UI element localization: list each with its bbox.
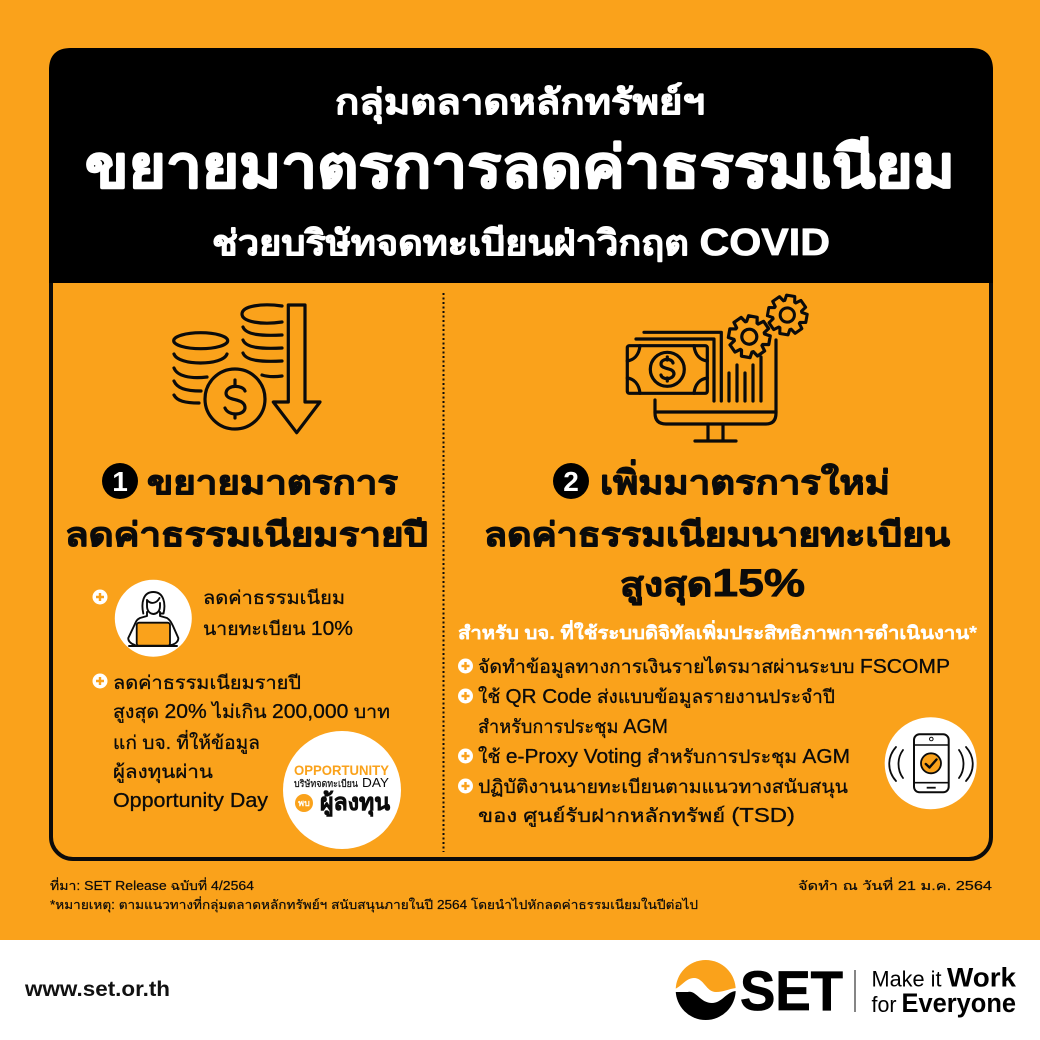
panel: main frame: [51, 50, 991, 859]
list: digital measures: สำหรับการประชุม AGM: [478, 716, 668, 739]
list: digital measures: ปฏิบัติงานนายทะเบียนตามแนวทางสนับสนุน: [478, 776, 848, 799]
badge: opportunity day: ผู้ลงทุน: [320, 789, 390, 817]
badge: opportunity day: บริษัทจดทะเบียน: [294, 778, 358, 790]
badge: number two: [553, 463, 589, 499]
badge: number two: 2: [563, 466, 579, 497]
footnote: source: ที่มา: SET Release ฉบับที่ 4/2564: [50, 877, 254, 893]
subheading: digital systems: สำหรับ บจ. ที่ใช้ระบบดิจิทัลเพิ่มประสิทธิภาพการดำเนินงาน*: [458, 620, 977, 643]
logo: SET: SET: [740, 959, 843, 1022]
badge: number one: [102, 463, 138, 499]
icon: banknote monitor and gears: [627, 292, 810, 441]
website url: www.set.or.th: [24, 978, 170, 1001]
icon: person with laptop: [115, 580, 192, 657]
heading: section two: [484, 459, 950, 606]
text block: registrar fee discount: [203, 587, 353, 640]
slogan: Work: [947, 962, 1017, 992]
heading: section two: เพิ่มมาตรการใหม่: [600, 459, 890, 501]
text block: annual fee discount: ผู้ลงทุนผ่าน: [113, 761, 213, 784]
text block: annual fee discount: Opportunity Day: [113, 790, 268, 812]
panel: black header band: [49, 48, 993, 283]
heading: line three: ช่วยบริษัทจดทะเบียนฝ่าวิกฤต COVID: [212, 222, 830, 264]
text block: annual fee discount: [113, 672, 390, 812]
text block: annual fee discount: ลดค่าธรรมเนียมรายปี: [113, 672, 301, 693]
list: digital measures: ใช้ QR Code ส่งแบบข้อมูลรายงานประจำปี: [478, 686, 835, 708]
icon: smartphone with check: [885, 717, 977, 809]
badge: opportunity day: พบ: [298, 798, 310, 808]
footnote: remark: *หมายเหตุ: ตามแนวทางที่กลุ่มตลาดหลักทรัพย์ฯ สนับสนุนภายในปี 2564 โดยนำไปหักลดค่าธรรมเนียมในปีต่อไป: [50, 896, 698, 913]
heading: section one: ลดค่าธรรมเนียมรายปี: [65, 516, 428, 553]
heading: line one: กลุ่มตลาดหลักทรัพย์ฯ: [335, 82, 705, 124]
icon: coins with down arrow: [174, 305, 320, 433]
footnote: date: จัดทำ ณ วันที่ 21 ม.ค. 2564: [798, 877, 992, 893]
divider in logo: [854, 970, 856, 1012]
icon: plus bullet: [92, 590, 108, 604]
heading: section two: สูงสุด 15%: [620, 562, 805, 606]
text block: registrar fee discount: ลดค่าธรรมเนียม: [203, 587, 345, 608]
text block: annual fee discount: สูงสุด 20% ไม่เกิน 200,000 บาท: [113, 701, 390, 724]
text block: annual fee discount: แก่ บจ. ที่ให้ข้อมูล: [113, 730, 260, 754]
slogan: for: [872, 992, 896, 1017]
text block: registrar fee discount: นายทะเบียน 10%: [203, 618, 353, 640]
badge: opportunity day: OPPORTUNITY: [294, 762, 390, 778]
heading: section two: ลดค่าธรรมเนียมนายทะเบียน: [484, 516, 950, 553]
heading: section one: ขยายมาตรการ: [147, 464, 398, 501]
slogan: [872, 962, 1017, 1018]
list: digital measures: ใช้ e-Proxy Voting สำหรับการประชุม AGM: [478, 746, 850, 769]
list: digital measures: ของ ศูนย์รับฝากหลักทรัพย์ (TSD): [478, 805, 795, 827]
list: digital measures: จัดทำข้อมูลทางการเงินรายไตรมาสผ่านระบบ FSCOMP: [478, 656, 950, 678]
heading: main title: ขยายมาตรการลดค่าธรรมเนียม: [85, 135, 955, 200]
logo: SET: [676, 960, 843, 1020]
badge: number one: 1: [112, 466, 128, 497]
slogan: Everyone: [902, 988, 1016, 1018]
icon: plus bullets: [458, 658, 473, 794]
list: digital measures: [458, 656, 950, 827]
heading: section one: [65, 463, 428, 553]
slogan: Make it: [872, 966, 942, 992]
badge: opportunity day: [283, 731, 401, 849]
badge: opportunity day: DAY: [362, 775, 389, 790]
icon: plus bullet: [92, 674, 108, 688]
